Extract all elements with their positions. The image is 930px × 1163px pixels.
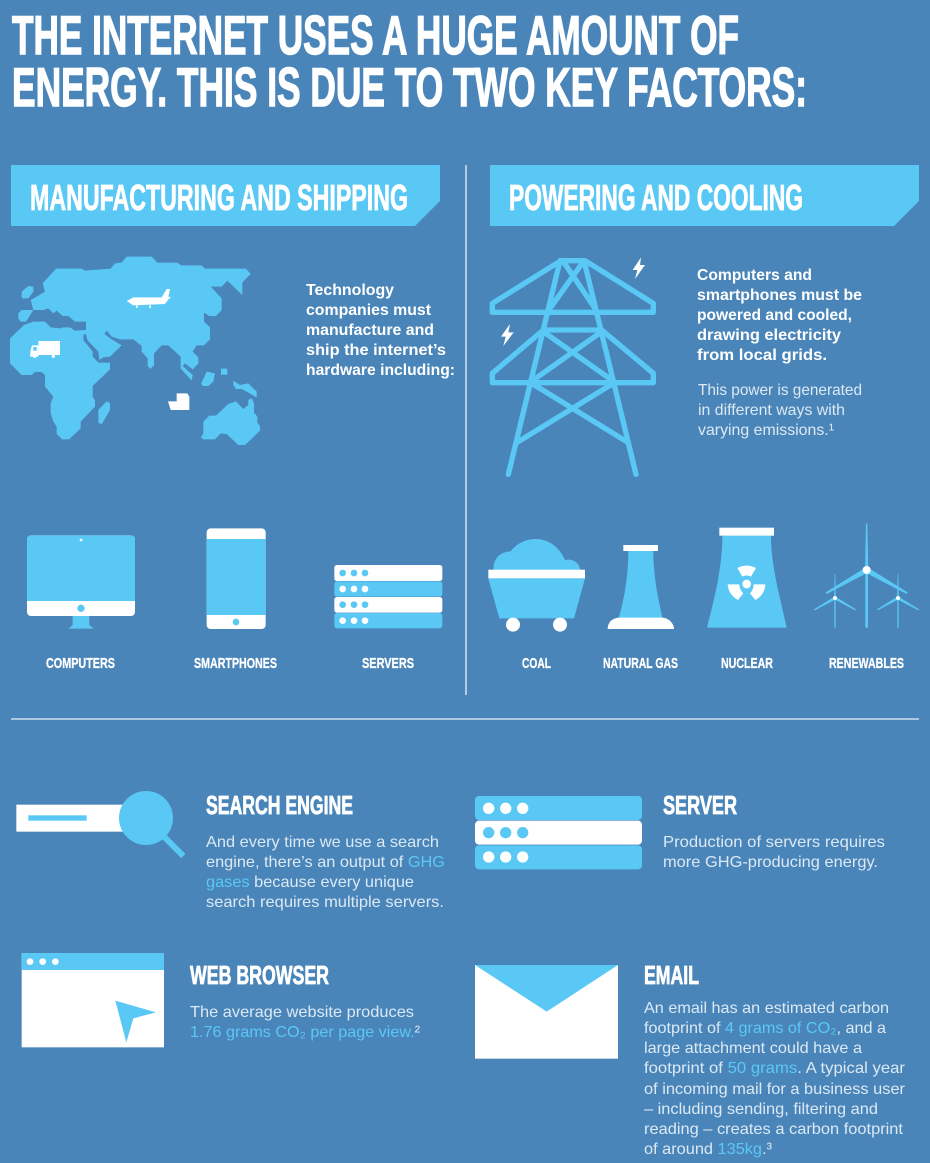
icon: email envelope [475, 965, 618, 1059]
panel: web browser: 1.76 grams CO₂ per page view.² [190, 1024, 421, 1041]
text block: powered and cooled: Computers and [697, 267, 812, 284]
panel: search engine: gases because every unique [206, 874, 414, 891]
text block: manufacture and ship: companies must [306, 302, 432, 319]
panel: search engine: engine, there’s an output of GHG [206, 854, 445, 871]
icon: computer [27, 535, 135, 629]
icon: server stack [334, 565, 442, 628]
icon: nuclear cooling tower [707, 528, 787, 628]
icon: electricity pylon [492, 257, 653, 474]
panel heading: manufacturing and shipping [11, 165, 440, 226]
panel: email: of around 135kg.³ [644, 1141, 773, 1158]
panel: email: footprint of 50 grams. A typical year [644, 1060, 906, 1077]
panel: email: An email has an estimated carbon [644, 1000, 889, 1017]
text block: power generation [698, 382, 862, 439]
text block: powered and cooled: smartphones must be [697, 287, 862, 304]
text block: powered and cooled: drawing electricity [697, 327, 841, 344]
title [12, 4, 807, 118]
panel: email: – including sending, filtering and [644, 1101, 878, 1118]
text block: manufacture and ship [306, 282, 455, 379]
panel: server [663, 790, 885, 871]
panel: server: more GHG-producing energy. [663, 854, 878, 871]
text block: power generation: varying emissions.¹ [698, 422, 834, 439]
panel: email: of incoming mail for a business user [644, 1081, 906, 1098]
icon: world map with plane, truck and ship [10, 257, 260, 445]
icon labels: SMARTPHONES [194, 655, 277, 672]
text block: manufacture and ship: hardware including: [306, 362, 455, 379]
panel: search engine: SEARCH ENGINE [206, 790, 353, 820]
panel: web browser: The average website produces [190, 1004, 414, 1021]
icon: wind turbines [814, 523, 919, 628]
panel: search engine: And every time we use a search [206, 834, 439, 851]
text block: manufacture and ship: Technology [306, 282, 394, 299]
icon: search bar and magnifier [16, 791, 183, 856]
text block: powered and cooled [697, 267, 862, 364]
panel: search engine [206, 790, 445, 911]
icon: web browser [22, 953, 164, 1047]
panel heading: powering and cooling [490, 165, 919, 226]
text block: powered and cooled: from local grids. [697, 347, 827, 364]
icon: natural gas tower [608, 545, 674, 629]
text block: powered and cooled: powered and cooled, [697, 307, 852, 324]
text block: manufacture and ship: manufacture and [306, 322, 434, 339]
panel: server: SERVER [663, 790, 737, 820]
icon labels: NUCLEAR [721, 655, 773, 672]
icon labels: NATURAL GAS [603, 655, 678, 672]
panel: server: Production of servers requires [663, 834, 885, 851]
panel: web browser [190, 960, 421, 1041]
icon: smartphone [207, 528, 266, 629]
text block: manufacture and ship: ship the internet’s [306, 342, 446, 359]
panel: email: reading – creates a carbon footprint [644, 1121, 904, 1138]
panel: email [644, 960, 906, 1158]
icon labels [46, 655, 904, 672]
panel heading: manufacturing and shipping: MANUFACTURING AND SHIPPING [30, 177, 408, 218]
text block: power generation: This power is generated [698, 382, 862, 399]
panel: web browser: WEB BROWSER [190, 960, 329, 990]
icon: coal cart [488, 539, 585, 632]
panel: search engine: search requires multiple servers. [206, 894, 444, 911]
icon: server [475, 796, 642, 869]
icon labels: COAL [522, 655, 551, 672]
panel: email: EMAIL [644, 960, 699, 990]
panel: email: footprint of 4 grams of CO₂, and a [644, 1020, 886, 1037]
icon labels: COMPUTERS [46, 655, 115, 672]
icon labels: SERVERS [362, 655, 414, 672]
text block: power generation: in different ways with [698, 402, 845, 419]
panel: email: large attachment could have a [644, 1040, 862, 1057]
